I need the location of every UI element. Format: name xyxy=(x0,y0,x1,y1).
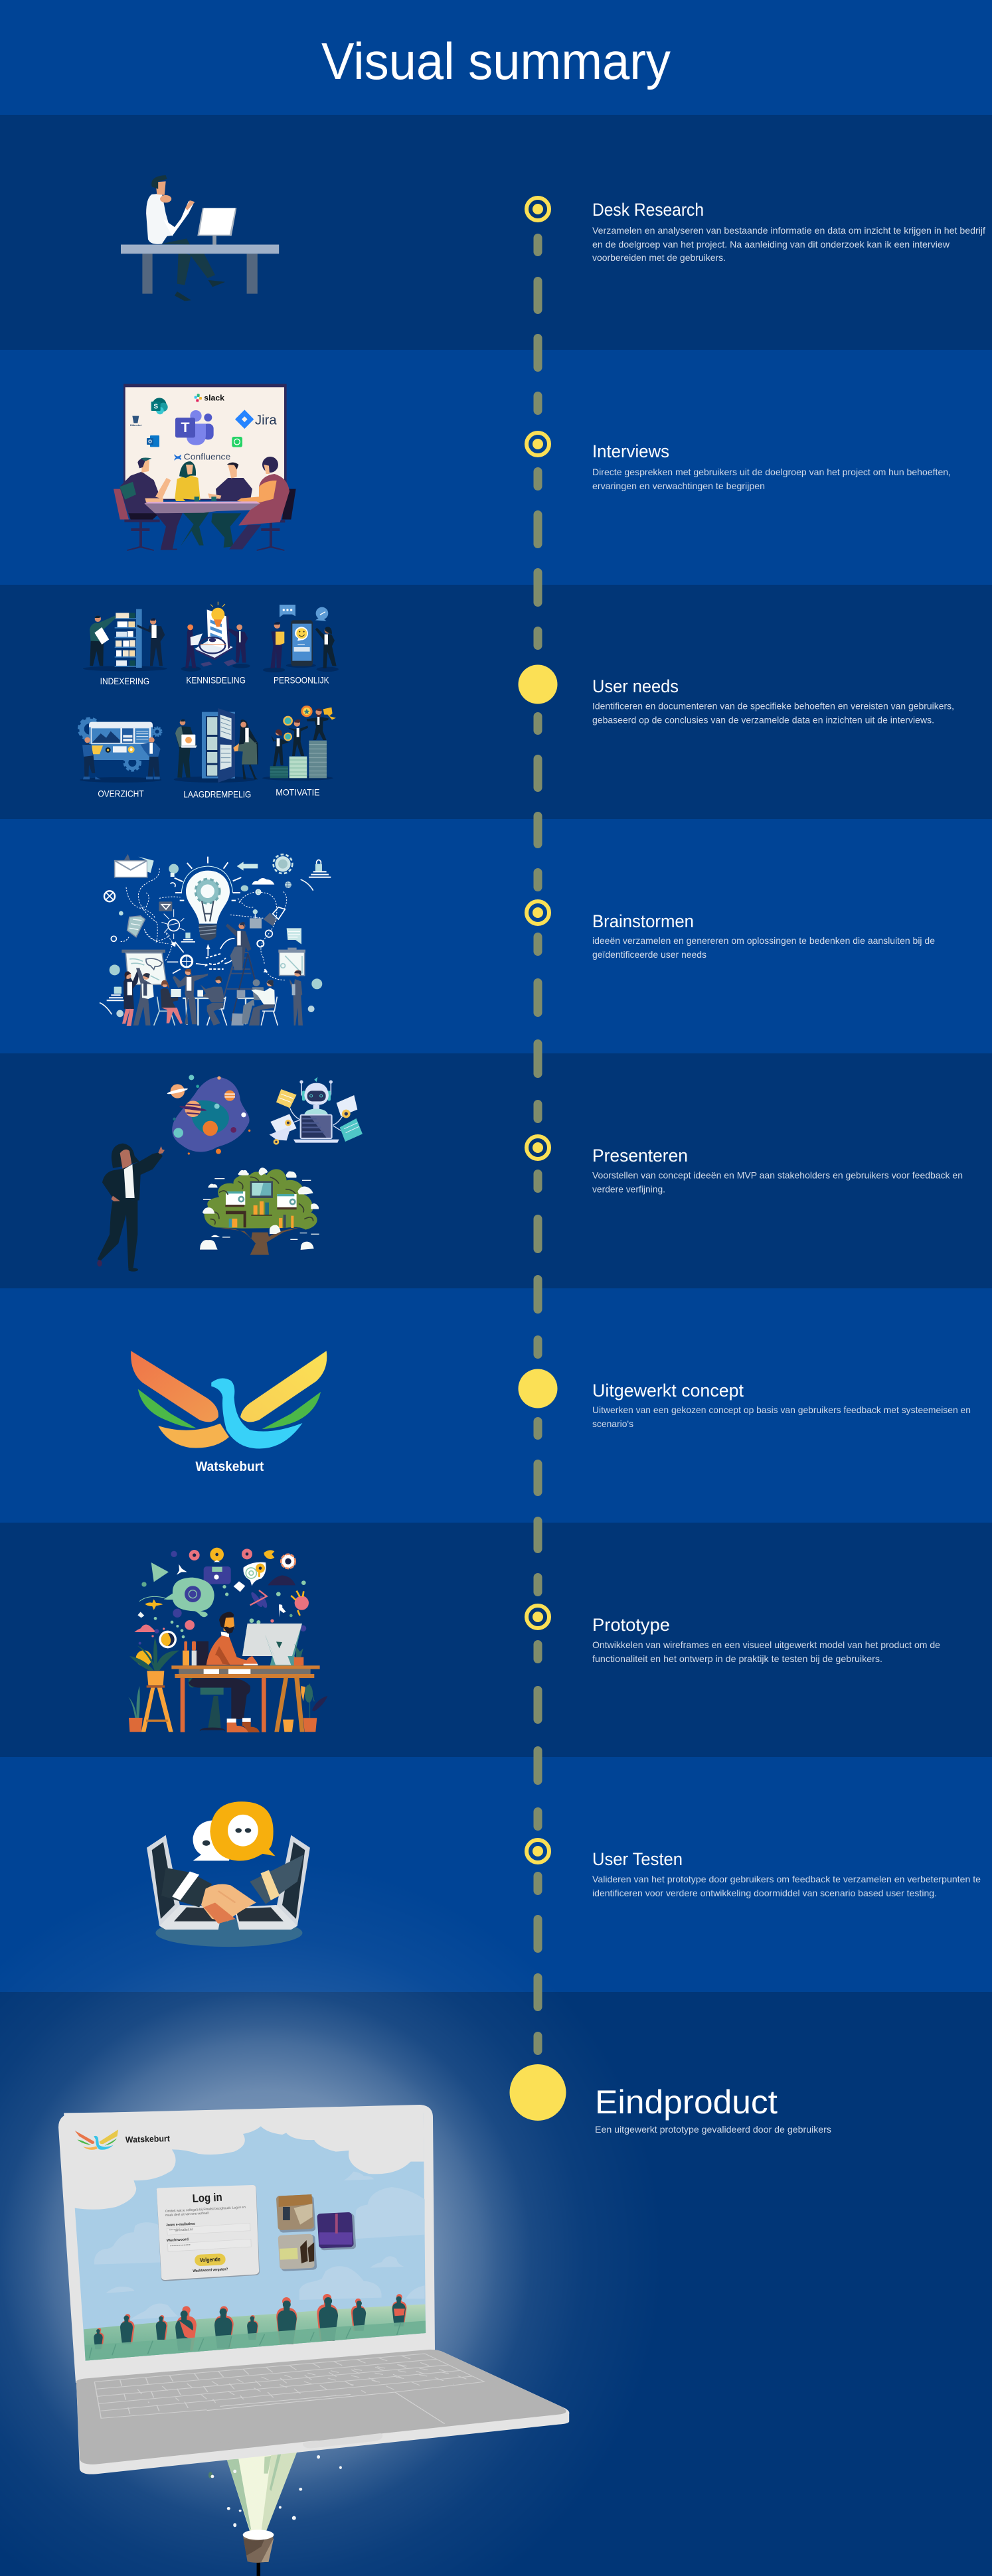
login screen text: Ontdek wat je collega's bij Finalist bezighoudt. Log in en xyxy=(165,2206,246,2214)
text block: identificeren voor verdere ontwikkeling doormiddel van scenario based user testing. xyxy=(592,1888,937,1898)
foreground clouds xyxy=(64,2109,424,2210)
text block: gebaseerd op de conclusies van de verzamelde data en inzichten uit de interviews. xyxy=(592,714,934,725)
panel: Presenteren xyxy=(0,1053,992,1288)
text block: ervaringen en verwachtingen te begrijpen xyxy=(592,481,765,491)
text block: Ontwikkelen van wireframes en een visueel uitgewerkt model van het product om de xyxy=(592,1639,940,1650)
heading: Desk Research xyxy=(592,200,704,220)
login screen text: Watskeburt xyxy=(125,2133,171,2145)
illustration: designer at desk with floating ideas xyxy=(128,1548,327,1732)
people around table xyxy=(114,457,296,551)
panel: Interviews xyxy=(0,350,992,585)
illustration grid: six user needs xyxy=(79,602,339,800)
plant on stool xyxy=(128,1637,179,1732)
text block: Valideren van het prototype door gebruikers om feedback te verzamelen en verbeterpunten te xyxy=(592,1874,981,1884)
galaxy xyxy=(167,1075,250,1155)
login screen text: Log in xyxy=(192,2191,222,2205)
icon: sharepoint xyxy=(151,398,168,414)
text block: verdere verfijning. xyxy=(592,1184,665,1195)
bulb xyxy=(175,857,241,941)
panel: User needs xyxy=(0,585,992,819)
text block: Voorstellen van concept ideeën en MVP aan stakeholders en gebruikers voor feedback en xyxy=(592,1170,963,1180)
text block: Uitwerken van een gekozen concept op basis van gebruikers feedback met systeemeisen en xyxy=(592,1404,971,1415)
text block xyxy=(592,1404,971,1429)
laptop lid xyxy=(58,2105,435,2383)
login screen text: ************ xyxy=(170,2243,191,2249)
illustration: handshake through laptops xyxy=(147,1801,310,1947)
sky clouds xyxy=(94,2172,425,2320)
text block: Verzamelen en analyseren van bestaande informatie en data om inzicht te krijgen in het bedrijf xyxy=(592,225,985,236)
heading: User needs xyxy=(592,676,679,696)
panel: Uitgewerkt concept xyxy=(0,1288,992,1523)
login screen text: Wachtwoord xyxy=(167,2237,189,2243)
tree xyxy=(200,1168,319,1255)
label: LAAGDREMPELIG xyxy=(183,789,251,800)
keyboard keys xyxy=(94,2354,484,2418)
label: KENNISDELING xyxy=(186,675,246,686)
text block: ideeën verzamelen en genereren om oplossingen te bedenken die aansluiten bij de xyxy=(592,935,935,946)
decorative idea icons xyxy=(100,854,331,1017)
label: MOTIVATIE xyxy=(276,787,320,797)
label: INDEXERING xyxy=(100,676,149,686)
laptop screen xyxy=(64,2109,426,2361)
icon: outlook: O xyxy=(148,439,152,445)
icon: ring marker xyxy=(527,901,549,924)
scene: indexering xyxy=(83,609,167,671)
robot xyxy=(270,1077,363,1145)
heading: Presenteren xyxy=(592,1146,688,1166)
boards xyxy=(122,948,305,984)
notch xyxy=(303,2433,382,2448)
illustration: light bulb brainstorm xyxy=(100,854,331,1025)
text block: Directe gesprekken met gebruikers uit de doelgroep van het project om hun behoeften, xyxy=(592,467,951,477)
icon: solid marker xyxy=(518,665,558,704)
timeline: dashed connector xyxy=(534,234,542,2055)
login screen text: maak deel uit van ons verhaal! xyxy=(165,2212,209,2218)
illustration: light beam from cup xyxy=(208,2451,342,2576)
heading: Interviews xyxy=(592,441,669,461)
text block: voorbereiden met de gebruikers. xyxy=(592,252,726,263)
panel: Eindproduct xyxy=(0,1992,992,2576)
floating shapes xyxy=(134,1548,309,1648)
photos xyxy=(276,2194,356,2271)
icon: ring marker xyxy=(527,1136,549,1159)
icon: ring marker xyxy=(527,1606,549,1628)
login screen text xyxy=(125,2133,246,2273)
presenter xyxy=(97,1144,165,1272)
illustration: presenter with three concepts xyxy=(97,1075,363,1272)
scene: motivatie xyxy=(262,706,336,781)
icon: teams xyxy=(175,410,214,445)
illustration: team meeting in front of tool board xyxy=(114,384,296,551)
scene: kennisdeling xyxy=(181,602,250,672)
icon: jira: Jira xyxy=(255,413,278,427)
icon: jira xyxy=(235,410,278,429)
text block xyxy=(592,225,985,263)
heading: User Testen xyxy=(592,1849,683,1869)
panel: Brainstormen xyxy=(0,819,992,1053)
text block xyxy=(592,1639,940,1664)
scene: laagdrempelig xyxy=(174,708,258,783)
login screen text: ****@finalist.nl xyxy=(169,2228,193,2233)
icon: solid marker xyxy=(510,2064,566,2121)
icon: teams: T xyxy=(181,419,190,435)
icon: ring marker xyxy=(527,433,549,455)
login card xyxy=(157,2185,260,2281)
icon: ring marker xyxy=(527,1840,549,1862)
icon: confluence: Confluence xyxy=(184,453,230,462)
text block: functionaliteit en het ontwerp in de praktijk te testen bij de gebruikers. xyxy=(592,1653,882,1664)
icon: bitbucket xyxy=(130,416,142,427)
label: OVERZICHT xyxy=(98,789,144,799)
login screen text: Wachtwoord vergeten? xyxy=(193,2267,228,2273)
logo: Watskeburt bird xyxy=(131,1351,327,1474)
text block: en de doelgroep van het project. Na aanleiding van dit onderzoek kan ik een interview xyxy=(592,239,950,250)
text block: geïdentificeerde user needs xyxy=(592,949,706,960)
icon: slack: slack xyxy=(204,394,225,402)
trackpad xyxy=(207,2391,445,2443)
logo: Watskeburt bird: Watskeburt xyxy=(195,1460,264,1474)
login screen text: Jouw e-mailadres xyxy=(166,2222,195,2228)
scene: overzicht xyxy=(79,718,162,783)
heading: Brainstormen xyxy=(592,911,694,931)
logo xyxy=(75,2129,118,2150)
login screen text: Volgende xyxy=(200,2255,220,2263)
laptop base and keyboard xyxy=(76,2350,569,2474)
label: PERSOONLIJK xyxy=(274,675,329,686)
icon: slack xyxy=(195,394,225,402)
panel: Prototype xyxy=(0,1523,992,1757)
text block xyxy=(592,935,935,960)
heading: Uitgewerkt concept xyxy=(592,1381,744,1401)
grass and people xyxy=(84,2294,426,2361)
text block xyxy=(592,467,951,491)
illustration: laptop with prototype login screen xyxy=(58,2105,569,2474)
icon: sharepoint: S xyxy=(153,404,158,411)
people xyxy=(123,922,303,1025)
desk, monitor and designer xyxy=(171,1612,327,1732)
panel: User Testen xyxy=(0,1757,992,1992)
text block: Identificeren en documenteren van de specifieke behoeften en vereisten van gebruikers, xyxy=(592,701,954,712)
text block: Een uitgewerkt prototype gevalideerd door de gebruikers xyxy=(595,2124,831,2135)
text block xyxy=(592,1170,963,1195)
heading: Prototype xyxy=(592,1615,670,1635)
text block xyxy=(592,701,954,725)
heading: Eindproduct xyxy=(595,2084,778,2121)
icon: bitbucket: Bitbucket xyxy=(130,424,142,427)
text block xyxy=(592,1874,981,1898)
icon: solid marker xyxy=(518,1369,558,1408)
icon: whatsapp xyxy=(232,437,242,447)
panel: Desk Research xyxy=(0,115,992,350)
illustration: person at desk xyxy=(121,175,279,301)
text block: scenario's xyxy=(592,1418,633,1429)
icon: outlook xyxy=(147,435,159,447)
title: Visual summary xyxy=(321,32,671,90)
icon: ring marker xyxy=(527,198,549,220)
scene: persoonlijk xyxy=(263,605,339,672)
